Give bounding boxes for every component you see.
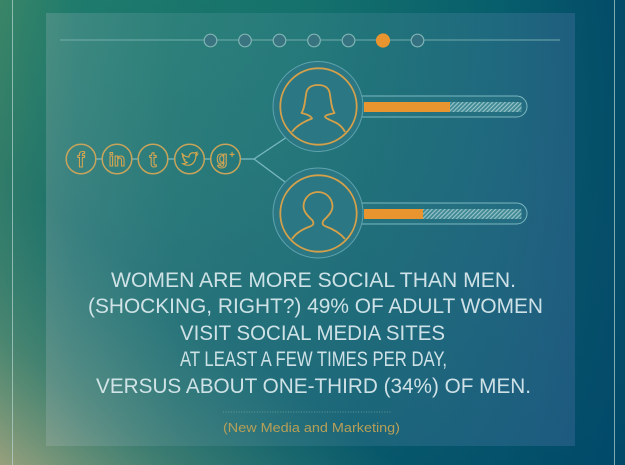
main statement: VERSUS ABOUT ONE-THIRD (34%) OF MEN. xyxy=(96,375,531,398)
main statement: VISIT SOCIAL MEDIA SITES xyxy=(180,322,445,345)
row: men xyxy=(273,168,527,258)
icon: twitter xyxy=(175,144,204,174)
progress bar: women 49% xyxy=(345,96,527,117)
progress stepper xyxy=(60,34,560,47)
avatar: woman xyxy=(280,68,357,145)
icon: google plus: g xyxy=(216,148,228,168)
icon: google plus xyxy=(211,144,240,174)
icon: linkedin: in xyxy=(109,149,125,170)
progress bar: men 34% xyxy=(345,203,527,224)
icon: facebook xyxy=(66,144,96,174)
icon: linkedin xyxy=(102,144,132,174)
main statement: (SHOCKING, RIGHT?) 49% OF ADULT WOMEN xyxy=(88,295,543,318)
avatar ring: women xyxy=(273,62,363,152)
icon: tumblr: t xyxy=(150,149,156,172)
dotted divider xyxy=(223,411,391,413)
source: (New Media and Marketing) xyxy=(223,421,400,435)
main statement: WOMEN ARE MORE SOCIAL THAN MEN. xyxy=(111,269,516,292)
main statement: AT LEAST A FEW TIMES PER DAY, xyxy=(180,348,447,371)
connector lines xyxy=(95,137,287,182)
row: women xyxy=(273,62,527,152)
main statement xyxy=(88,269,543,398)
icon: facebook: f xyxy=(78,149,86,172)
icon: tumblr xyxy=(138,144,168,174)
panel xyxy=(46,13,575,446)
icon: google plus: + xyxy=(229,150,235,161)
avatar: man xyxy=(280,175,357,252)
avatar ring: men xyxy=(273,168,363,258)
social icons row xyxy=(66,144,240,174)
